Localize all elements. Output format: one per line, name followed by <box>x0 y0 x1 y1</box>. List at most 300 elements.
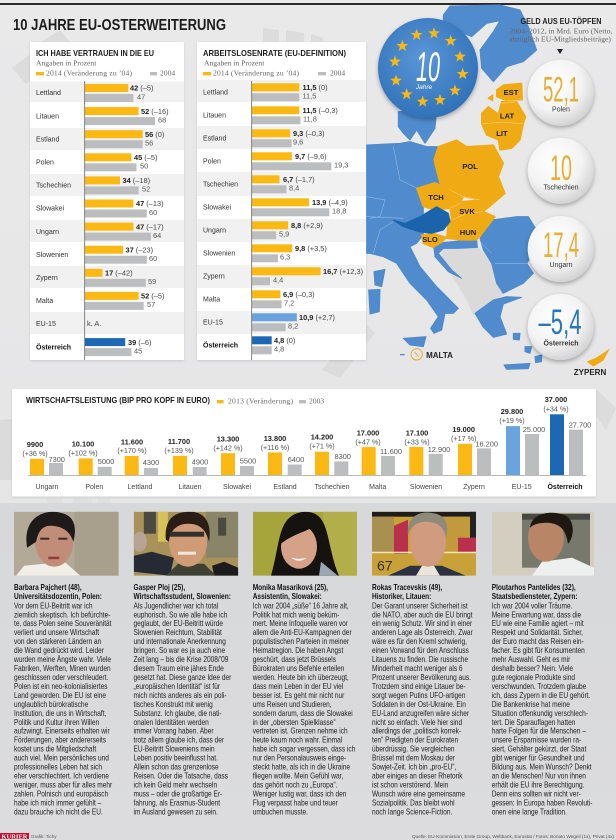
row: Litauen: 52 (–16) <box>141 107 169 116</box>
bars: Estland: (+116 %) <box>261 443 289 452</box>
bubble: Österreich -5,4: Österreich <box>543 339 579 348</box>
quote: Gasper Ploj: euphorisch. So wie alle habe ich <box>134 610 227 619</box>
quote: Ploutarhos Pantelides: facher. Es gibt für Konsumenten <box>492 645 585 655</box>
row: Ungarn: Ungarn <box>36 229 59 236</box>
quote: Rokas Tracevskis: anderen Lage als Österreich. Zwar <box>372 628 473 637</box>
quote: Gasper Ploj: Gasper Ploj (25), <box>134 582 185 592</box>
bars: Österreich: (+34 %) <box>543 405 569 414</box>
quote: Barbara Pajchert: Förderungen, aber andererseits <box>14 735 106 745</box>
bars: Malta <box>355 428 402 491</box>
quote: Gasper Ploj: Zeit lang – bis die Krise 2008/’09 <box>134 654 228 664</box>
bars: Litauen: 11.700 <box>168 437 190 446</box>
row: Slowakei: Slowakei <box>203 204 231 212</box>
row: Estland <box>36 130 164 148</box>
quote: Rokas Tracevskis: Der Garant unserer Sicherheit ist <box>372 601 468 610</box>
row: Malta <box>36 292 164 310</box>
panel: trust in the EU <box>30 42 184 360</box>
row: Tschechien: 8,4 <box>289 184 299 193</box>
quote: Ploutarhos Pantelides: Denn eins sollten wir nicht ver- <box>492 789 581 799</box>
bars: EU-15: EU-15 <box>512 484 532 491</box>
row: Litauen: Litauen <box>203 112 226 120</box>
quote: Ploutarhos Pantelides: Respekt und Solidarität. Sicher, <box>492 628 583 637</box>
quote: Ploutarhos Pantelides: tert. Die Sparauflagen hatten <box>492 717 575 727</box>
bars: Tschechien: Tschechien <box>314 484 350 491</box>
quote: Gasper Ploj: Als Jugendlicher war ich total <box>134 601 219 610</box>
quote: Barbara Pajchert: aufzwingt. Einerseits erhalten wir <box>14 726 110 736</box>
Austria highlighted <box>393 207 450 233</box>
row: Slowakei: 60 <box>149 208 157 217</box>
bars: Zypern: 19.000 <box>452 425 475 434</box>
row: Tschechien: 6,7 (–1,7) <box>283 175 315 184</box>
quote: Ploutarhos Pantelides: Staatsbediensteter, Zypern: <box>492 591 578 601</box>
quote: Rokas Tracevskis: Sowjet-Zeit. Ich bin „pro-EU“, <box>372 762 456 772</box>
row: Slowakei <box>203 198 348 216</box>
lower background band <box>0 503 616 840</box>
quote: Barbara Pajchert: professionelles Leben hat sich <box>14 762 102 772</box>
quote: Barbara Pajchert: von den stärkeren Ländern an <box>14 636 101 646</box>
quote: Gasper Ploj: Slowenien Reichtum, Stabilität <box>134 628 222 637</box>
quote: Ploutarhos Pantelides: unsere Ersparnisse wurden ra- <box>492 735 582 745</box>
badge: 10 Jahre: Jahre <box>415 84 433 91</box>
quote: Monika Masarikova: steckt hatte, als ich in die Ukraine <box>253 762 350 772</box>
quote: Barbara Pajchert: Universitätsdozentin, Polen: <box>14 591 102 601</box>
row stripes <box>30 82 184 334</box>
quote: Monika Masarikova: Ich war 2004 „süße“ 16 Jahre alt, <box>253 601 349 610</box>
quote: Rokas Tracevskis: Historiker, Litauen: <box>372 591 431 601</box>
quote: Barbara Pajchert: weniger, muss aber für alles mehr <box>13 780 113 790</box>
bars: Polen <box>68 440 114 491</box>
row: Slowenien: 9,8 (+3,5) <box>295 244 327 253</box>
row: Tschechien: Tschechien <box>36 183 71 190</box>
heading: money from EU funds <box>509 17 613 54</box>
row: Slowakei: Slowakei <box>36 206 64 213</box>
photo: Rokas Tracevskis <box>372 512 476 576</box>
bubble: Ungarn 17,4: Ungarn <box>550 262 573 269</box>
badge: 10 Jahre: 10 <box>416 43 440 90</box>
map labels: EST <box>504 88 519 97</box>
bars: Polen: (+102 %) <box>68 448 98 458</box>
quote: Gasper Ploj <box>134 582 232 817</box>
row: Litauen <box>203 106 338 124</box>
heading: money from EU funds: 2004–2012, in Mrd. Euro (Netto, <box>510 26 613 36</box>
row: Slowakei: 47 (–13) <box>136 199 164 208</box>
bars: Slowakei: (+142 %) <box>213 444 243 452</box>
quote: Gasper Ploj: immer Vorrang haben. Aber <box>134 726 214 736</box>
quote: Monika Masarikova: habe ich sogar vergessen, dass ich <box>253 744 355 754</box>
quote: Ploutarhos Pantelides: Ploutarhos Pantelides (32), <box>492 582 576 592</box>
row: Litauen: 11,8 <box>303 115 317 124</box>
row: Österreich: 45 <box>134 346 142 355</box>
bars: Slowakei: Slowakei <box>223 484 251 491</box>
bars: EU-15: 25.000 <box>523 425 545 434</box>
row: Ungarn <box>36 222 164 241</box>
map labels: TCH <box>428 193 444 202</box>
bars: EU-15 <box>499 407 545 491</box>
bars: Zypern: (+17 %) <box>451 434 476 443</box>
baseline <box>28 474 586 477</box>
quote: Rokas Tracevskis: ten“ Predigten der Eurokraten <box>372 735 458 745</box>
bars: Ungarn <box>22 440 65 491</box>
quote: Ploutarhos Pantelides: an die Menschen! Nur von ihnen <box>492 771 586 781</box>
quote: Gasper Ploj: Wirtschaftsstudent, Slowenien: <box>134 591 231 601</box>
quote: Ploutarhos Pantelides: verschwunden. Trotzdem glaube <box>492 681 586 691</box>
map labels: SLO <box>422 235 438 244</box>
yellow: Lithuania <box>482 122 523 150</box>
quote: Monika Masarikova: fliegen wollte. Mein Gefühl war, <box>253 771 343 781</box>
row: EU-15: EU-15 <box>203 320 223 326</box>
row stripes <box>197 80 366 334</box>
row: Estland <box>203 129 325 147</box>
row: Estland: 56 <box>145 138 153 147</box>
non-member background land <box>440 245 503 315</box>
quote: Monika Masarikova: Bürokraten uns Befehle erteilen <box>253 663 344 673</box>
EU member states in blue <box>367 5 542 369</box>
bars: Estland: 6400 <box>288 455 304 464</box>
bubble: Ungarn 17,4 <box>528 216 594 282</box>
quote: Gasper Ploj: Reisen. Oder die Tatsache, dass <box>134 771 228 781</box>
row: Österreich <box>203 336 295 354</box>
row: EU-15 <box>36 319 101 328</box>
bars: Slowenien: 12.900 <box>428 445 450 454</box>
bars: Slowenien: 17.100 <box>406 428 428 438</box>
quote: Gasper Ploj: Allein schon das grenzenlose <box>134 762 219 772</box>
bars: Zypern <box>451 425 498 491</box>
row: Slowenien: 60 <box>149 254 157 263</box>
quote: Rokas Tracevskis: ist schon verstörend. Mein <box>372 780 448 790</box>
row: Zypern: 4,4 <box>273 276 283 285</box>
quote: Barbara Pajchert: unglaublich bürokratische <box>14 699 88 709</box>
quote: Barbara Pajchert: wurden meine Ängste wahr. Viele <box>13 654 111 664</box>
row: Litauen <box>36 107 169 125</box>
bars: Malta: Malta <box>369 484 386 491</box>
quote: Ploutarhos Pantelides: ich, dass Zypern in die EU gehört. <box>492 690 590 700</box>
quote: Barbara Pajchert: te, dass Polen seine Souveränität <box>14 619 111 628</box>
bars: Malta: 11.600 <box>380 447 402 456</box>
bubble: Ungarn 17,4: 17,4 <box>543 226 579 265</box>
legend <box>36 68 175 78</box>
row: Estland: Estland <box>36 136 59 143</box>
quote: Monika Masarikova: Flug verpasst habe und teuer <box>253 798 338 808</box>
row: Ungarn <box>203 221 323 239</box>
panel background <box>30 42 184 360</box>
row: Litauen: 68 <box>158 115 166 124</box>
quote: Rokas Tracevskis: Brüssel mit dem Moskau der <box>372 753 455 763</box>
legend: 2004 <box>160 68 175 78</box>
quote: Monika Masarikova: Monika Masariková (25), <box>253 582 328 592</box>
quote: Monika Masarikova: Weniger lustig war, dass ich den <box>253 789 346 799</box>
yellow: Poland <box>434 140 505 203</box>
row: Slowakei: 18,8 <box>332 207 346 216</box>
quote: Monika Masarikova: populistischen Parteien in meiner <box>253 636 350 646</box>
row: EU-15: 10,9 (+2,7) <box>299 313 335 322</box>
quote: Rokas Tracevskis: Prozent unserer Bevölkerung aus. <box>372 672 471 682</box>
bars: Ungarn: (+36 %) <box>22 449 48 458</box>
subheading: Angaben in Prozent <box>36 59 97 68</box>
quote: Rokas Tracevskis: Sozialpolitik. Das bleibt wohl <box>372 798 455 808</box>
quote: Monika Masarikova: Assistentin, Slowakei: <box>253 591 322 601</box>
quote: Ploutarhos Pantelides: Situation offenkundig verschlech- <box>492 708 588 718</box>
row: Zypern: 59 <box>148 277 156 286</box>
quote: Monika Masarikova: besser ist. Es geht mir nicht nur <box>253 690 345 700</box>
footer: Kurier logo <box>0 833 29 840</box>
bubble: Polen 52,1: 52,1 <box>543 71 579 110</box>
quote: Barbara Pajchert: ziemlich skeptisch. Ich befürchte- <box>14 610 111 619</box>
map of Europe <box>367 5 610 369</box>
yellow: Czech Republic <box>417 183 463 210</box>
quote: Barbara Pajchert: Polen ist ein neo-kolonialisiertes <box>14 681 108 691</box>
row: Slowenien: Slowenien <box>36 252 68 259</box>
title: 10 JAHRE EU-OSTERWEITERUNG <box>13 17 226 34</box>
row: Litauen: Litauen <box>36 113 59 120</box>
row: Tschechien: 52 <box>142 185 150 194</box>
quote: Gasper Ploj: ich kein Geld mehr wechseln <box>134 780 217 790</box>
row: Polen: 9,7 (–9,6) <box>295 152 327 161</box>
row: Litauen: 11,5 (–0,3) <box>302 106 338 115</box>
row: Malta: 52 (–5) <box>141 292 164 301</box>
legend <box>203 68 345 78</box>
quote: Barbara Pajchert: habe ich mich immer gefühlt – <box>14 798 102 808</box>
bars: Tschechien: (+71 %) <box>309 442 335 450</box>
row: Zypern: 16,7 (+12,3) <box>323 267 363 276</box>
quote: Gasper Ploj: und internationale Anerkennung <box>134 636 226 646</box>
quote: Barbara Pajchert: zahlen. Polnisch und europäisch <box>14 789 108 799</box>
bars: EU-15: (+19 %) <box>499 416 525 425</box>
row: Slowenien: Slowenien <box>203 250 235 258</box>
row: Tschechien <box>36 176 150 194</box>
bars: Lettland: Lettland <box>128 484 153 491</box>
quote: Rokas Tracevskis: sorgt wegen Putins UFO-artigen <box>372 690 465 700</box>
quote: Rokas Tracevskis: EU-Land anzugreifen wäre sicher <box>372 708 470 718</box>
bars: Litauen: Litauen <box>179 484 202 491</box>
legend: 2013 (Veränderung) <box>228 396 293 406</box>
row: Polen: 45 (–5) <box>134 153 157 162</box>
footer: source line: Quelle: EU-Kommission, Erste Group, Weltbank, Eurostat / Fotos: Bonato Wegeil (1x), Privat (4x) <box>412 834 614 839</box>
quote: Barbara Pajchert: die Wand gedrückt wird. Leider <box>14 645 104 655</box>
yellow: Slovenia <box>422 233 447 247</box>
legend <box>217 396 324 406</box>
subheading: Angaben in Prozent <box>204 59 265 68</box>
quote: Barbara Pajchert: Politik und Kultur ihren Willen <box>14 717 99 727</box>
row: Malta: 6,9 (–0,3) <box>283 290 315 299</box>
quote: Gasper Ploj: fahrung, als Erasmus-Student <box>134 798 220 808</box>
quote: Rokas Tracevskis: Wunsch wäre eine gemeinsame <box>372 789 465 799</box>
row: Ungarn: 47 (–17) <box>136 222 164 231</box>
bars: Tschechien: 8300 <box>334 452 351 461</box>
quote: Ploutarhos Pantelides <box>492 582 593 817</box>
row: Ungarn: Ungarn <box>203 228 226 234</box>
quote: Rokas Tracevskis: aber einiges an dieser Rhetorik <box>372 771 463 781</box>
row: Zypern: 17 (–42) <box>105 268 133 278</box>
bubble: Tschechien 10 <box>528 138 594 204</box>
quote: Rokas Tracevskis: Rokas Tracevskis (49), <box>372 582 442 592</box>
row: Österreich: 4,8 (0) <box>274 336 295 345</box>
quote: Ploutarhos Pantelides: Ich war 2004 voller Träume. <box>492 601 572 610</box>
quote: Gasper Ploj: „europäischen Identität“ ist für <box>134 681 221 691</box>
quote: Barbara Pajchert: Institution, die uns in Wirtschaft, <box>14 708 106 718</box>
axis <box>250 81 253 360</box>
row: Malta: Malta <box>36 298 53 305</box>
quote: Gasper Ploj: bringen. So war es ja auch eine <box>134 645 225 655</box>
panel background <box>12 389 596 496</box>
Malta marker <box>400 349 422 360</box>
yellow: Slovakia <box>450 200 493 220</box>
quote: Rokas Tracevskis: allerdings der „politisch korrek- <box>372 726 462 736</box>
row: Tschechien <box>203 175 315 193</box>
quote: Monika Masarikova: mert. Meine Infoquelle waren vor <box>253 619 348 628</box>
quote: Rokas Tracevskis: Litauens zu finden. Die russische <box>372 654 468 664</box>
quote: Monika Masarikova: dass mein Leben in der EU viel <box>253 681 344 691</box>
map labels: HUN <box>460 228 476 237</box>
heading: money from EU funds: abzüglich EU-Mitgliedsbeiträge) <box>509 34 611 44</box>
quote: Ploutarhos Pantelides: siert, Gehälter gekürzt, der Staat <box>492 744 586 754</box>
quote: Ploutarhos Pantelides: gibt weniger für Gesundheit und <box>492 753 584 763</box>
bubble: Österreich -5,4 <box>528 294 594 360</box>
bars: Litauen <box>164 437 208 491</box>
row: Österreich: Österreich <box>203 340 238 350</box>
yellow: Hungary <box>447 212 495 240</box>
photo: Monika Masarikova <box>253 512 357 576</box>
quote: Barbara Pajchert: eher verschlechtert. Ich verdiene <box>14 771 109 781</box>
row: Malta: Malta <box>203 296 220 304</box>
row: Polen: Polen <box>203 158 221 166</box>
map labels: POL <box>462 162 478 171</box>
row: Polen: 19,3 <box>334 161 348 170</box>
quote: Gasper Ploj: tisches Konstrukt mit wenig <box>134 699 213 709</box>
quote: Barbara Pajchert: Fabriken, Werften, Minen wurden <box>14 663 111 673</box>
quote: Rokas Tracevskis: nicht so einfach. Viele hier sind <box>372 717 462 727</box>
row: Lettland: 47 <box>137 92 145 101</box>
bars: Tschechien: 14.200 <box>311 432 333 442</box>
quote: Gasper Ploj: onalen Identitäten werden <box>134 717 209 727</box>
legend: 2004 <box>330 68 345 78</box>
row: Slowenien <box>203 244 327 262</box>
map labels: MALTA <box>426 351 453 360</box>
row: Tschechien: 34 (–18) <box>122 176 150 185</box>
row: Ungarn: 64 <box>153 231 161 240</box>
yellow: Estonia <box>488 83 522 101</box>
row: Slowenien <box>36 245 157 264</box>
bars: Malta: (+47 %) <box>355 438 381 446</box>
quote: Ploutarhos Pantelides: Die Bankenkrise hat meine <box>492 699 570 709</box>
heading: WIRTSCHAFTSLEISTUNG (BIP PRO KOPF IN EURO) <box>26 395 210 405</box>
quote: Rokas Tracevskis: einen Vorwand für den Anschluss <box>372 645 469 655</box>
quote: Gasper Ploj: trotz allem glaube ich, dass der <box>134 735 225 745</box>
row: Zypern: Zypern <box>36 275 58 282</box>
heading: ICH HABE VERTRAUEN IN DIE EU <box>36 48 154 58</box>
quote: Ploutarhos Pantelides: gessen: In Europa haben Revoluti- <box>492 798 593 808</box>
row: EU-15: k. A. <box>87 319 101 328</box>
row: EU-15: EU-15 <box>36 321 56 328</box>
quote: Rokas Tracevskis: Minderheit macht weniger als 6 <box>372 663 463 673</box>
row: EU-15 <box>203 313 335 331</box>
quote: Monika Masarikova: umbuchen musste. <box>253 807 308 817</box>
yellow: Latvia <box>482 102 526 124</box>
row: Zypern <box>203 267 363 285</box>
row: Ungarn: 8,8 (+2,9) <box>291 221 323 230</box>
quote: Ploutarhos Pantelides: EU wie eine Familie agiert – mit <box>492 619 584 628</box>
footer: graphic credit: Grafik: Tichy <box>31 834 57 839</box>
bubble: Polen 52,1: Polen <box>552 107 570 114</box>
bars: Malta: 17.000 <box>357 428 379 438</box>
row: Ungarn: 5,9 <box>279 230 289 239</box>
row: Lettland: 11,5 <box>302 92 316 101</box>
row: Zypern <box>36 268 156 287</box>
bars: Slowenien <box>404 428 450 491</box>
row: Lettland: 42 (–5) <box>130 84 153 93</box>
bars: Slowakei <box>213 434 256 491</box>
quote: Barbara Pajchert: Vor dem EU-Beitritt war ich <box>14 601 93 610</box>
quote: Monika Masarikova: ums Reisen und Studieren, <box>253 699 332 709</box>
quote: Monika Masarikova: geschürt, dass jetzt Brüssels <box>253 654 336 664</box>
bubble: Polen 52,1 <box>528 60 594 126</box>
decorative background diamonds <box>0 28 616 512</box>
panel background <box>197 42 366 360</box>
row: Polen: Polen <box>36 160 54 166</box>
quote: Rokas Tracevskis: die NATO, aber auch die EU bringt <box>372 610 473 619</box>
row: Estland: 9,3 (–0,3) <box>293 129 325 138</box>
quote: Barbara Pajchert: verliert und unsere Wirtschaft <box>14 628 99 637</box>
bars: Tschechien <box>309 432 351 491</box>
bars: Lettland: 4300 <box>143 458 159 467</box>
bars: Zypern: Zypern <box>463 484 485 491</box>
quote: Rokas Tracevskis: Soldaten in der Ost-Ukraine. Ein <box>372 699 466 709</box>
quote: Barbara Pajchert: Land geworden. Die EU ist eine <box>14 690 106 700</box>
row: Polen: 50 <box>140 162 148 171</box>
row: Österreich: 39 (–6) <box>128 338 151 347</box>
quote: Ploutarhos Pantelides: der Euro macht das Reisen ein- <box>492 636 584 646</box>
quote: Ploutarhos Pantelides: deshalb besser? Nein. Viele <box>492 663 573 673</box>
quote: Monika Masarikova: sondern darum, dass die Slowakei <box>253 708 353 718</box>
row: Österreich: 4,8 <box>274 345 284 354</box>
quote: Rokas Tracevskis: überdrüssig. Sie vergleichen <box>372 744 455 754</box>
bars: Österreich <box>543 395 591 491</box>
quote: Rokas Tracevskis: Trotzdem sind einige Litauer be- <box>372 681 466 691</box>
quote: Ploutarhos Pantelides: gute regionale Produkte sind <box>492 672 575 682</box>
row: Österreich: Österreich <box>36 342 71 351</box>
quote: Gasper Ploj: diesem Traum eine jähes Ende <box>134 663 224 673</box>
map labels: LIT <box>496 129 508 138</box>
quote: Gasper Ploj: gesetzt hat. Diese ganze Idee der <box>134 672 232 682</box>
photo: Rokas Tracevskis: 67 <box>377 558 393 574</box>
quote: Monika Masarikova: werden. Heute bin ich überzeugt, <box>252 672 349 682</box>
row: Lettland <box>36 84 153 102</box>
row: Estland: Estland <box>203 136 226 142</box>
bubble: Tschechien 10: Tschechien <box>543 184 579 192</box>
quote: Ploutarhos Pantelides: Bildung aus. Mein Wunsch? Denkt <box>492 762 592 772</box>
quote: Monika Masarikova: Politik hat mich wenig beküm- <box>253 610 340 619</box>
bars: Lettland <box>117 437 159 491</box>
row: Slowenien: 6,3 <box>280 253 290 262</box>
quote: Gasper Ploj: mich nichts anderes als ein poli- <box>134 690 227 700</box>
map labels <box>422 88 606 377</box>
quote: Monika Masarikova <box>252 582 355 817</box>
quote: Monika Masarikova: nur den Personalausweis einge- <box>253 753 347 763</box>
row: Estland: 56 (0) <box>145 130 164 139</box>
bars: Ungarn: 7300 <box>48 455 65 464</box>
bars: Estland <box>261 434 304 491</box>
map labels: LAT <box>500 112 514 120</box>
quote: Barbara Pajchert <box>13 582 113 817</box>
row: Zypern: Zypern <box>203 274 225 280</box>
panel: GDP per capita <box>12 389 596 496</box>
bars: Estland: 13.800 <box>264 434 286 443</box>
axis <box>83 81 86 360</box>
quote: Ploutarhos Pantelides: mehr Auswahl. Geht es mir <box>492 654 571 664</box>
quote: Ploutarhos Pantelides: Meine Erwartung war, dass die <box>492 610 581 619</box>
row: Malta: 7,2 <box>284 299 294 308</box>
row: Estland: 9,6 <box>293 138 303 147</box>
bars: Zypern: 16.200 <box>475 440 498 448</box>
